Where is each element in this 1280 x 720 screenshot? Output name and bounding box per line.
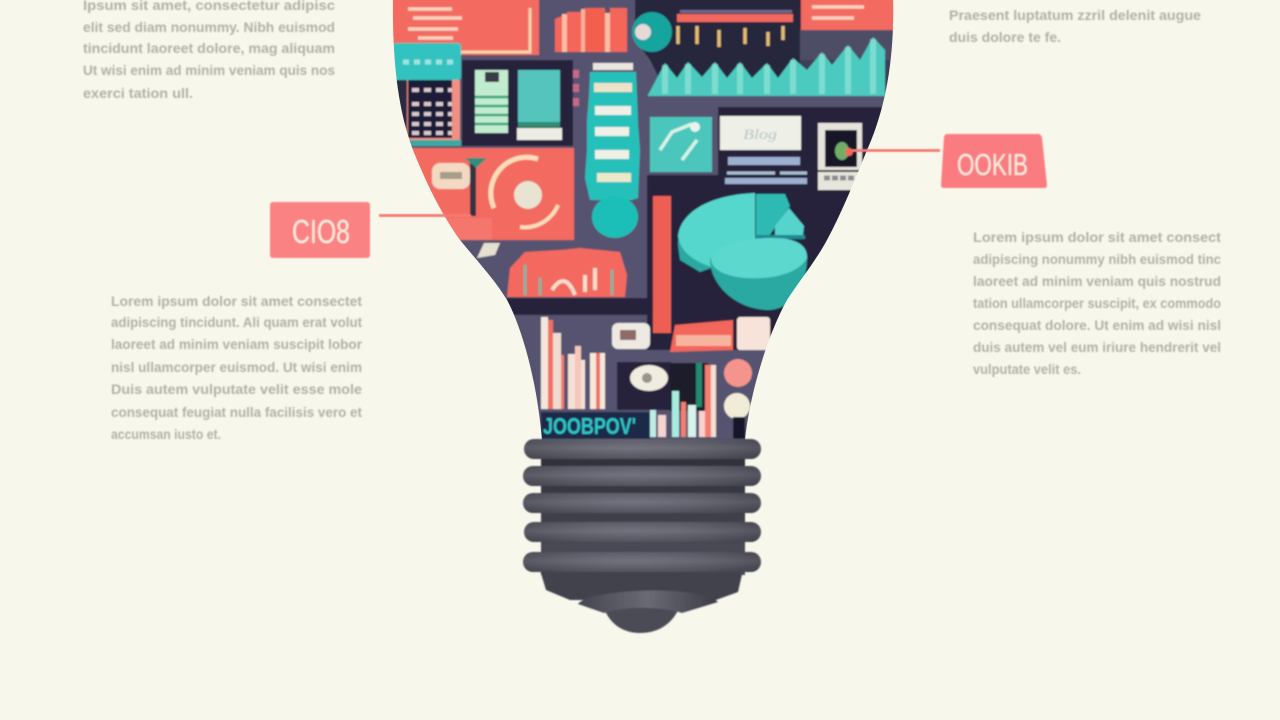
base tip [603,602,680,633]
connector line: left callout [379,214,471,217]
callout: right coral tag: OOKIB [957,147,1028,182]
text block: top left [83,0,335,101]
card: dark patch with oval [617,362,708,411]
text block: top left: Ut wisi enim ad minim veniam quis nos [83,62,335,78]
callout: left coral tag [270,202,370,258]
card: white label with blue lines: Blog [743,127,778,143]
panel: top left coral [390,0,539,55]
panel: dark right dashboard [647,107,895,350]
icon: photo frame [818,123,862,190]
base core [541,455,745,575]
text block: bottom left [111,293,363,442]
base dome [578,591,718,613]
bar chart: cyan and pink bars [650,365,716,437]
panel: dark top centre timeline [635,0,802,80]
text block: bottom left: Lorem ipsum dolor sit amet consectet [111,293,362,309]
lightbulb glass filled with data mosaic [385,0,900,445]
icon: pink and cream circles [724,359,752,439]
icon: teal square [650,117,712,172]
text block: bottom right: duis autem vel eum iriure hendrerit vel [973,339,1221,355]
text block: bottom left: nisl ullamcorper euismod. Ut wisi enim [111,359,362,375]
text block: bottom right: laoreet ad minim veniam quis nostrud [973,273,1221,289]
lightbulb screw base [523,439,761,633]
text block: bottom left: consequat feugiat nulla facilisis vero et [111,404,362,420]
icon: teal circle [632,12,672,52]
card: white label with blue lines [720,116,807,184]
chart: 3D teal pie [678,193,807,310]
base lower collar [540,570,743,600]
callout: right coral tag [941,134,1047,188]
connector line: right callout [852,149,940,152]
panel: dark cards with teal rectangle [462,60,573,146]
text block: bottom right: Lorem ipsum dolor sit amet consect [973,229,1221,245]
text block: bottom right: tation ullamcorper suscipit, ex commodo [973,295,1221,311]
text block: top left: elit sed diam nonummy. Nibh euismod [83,19,335,35]
text block: top right: Praesent luptatum zzril delenit augue [949,7,1201,23]
text block: bottom right: vulputate velit es. [973,361,1081,377]
thread ring 3 [523,493,761,513]
stacked list: teal column [576,63,640,238]
panel: teal header and keypad [393,43,461,146]
text block: bottom left: accumsan iusto et. [111,426,221,442]
chart: coral vertical bar [653,196,671,333]
panel: coral dial [408,148,574,240]
text block: bottom left: Duis autem vulputate velit esse mole [111,381,362,397]
bar chart: coral top [555,8,627,52]
thread ring 4 [524,522,761,542]
illustration: coral blob [477,243,647,315]
text block: bottom right: adipiscing nonummy nibh euismod tinc [973,251,1221,267]
callout: left coral tag: CIO8 [292,213,350,250]
area chart: teal mountains [648,30,895,96]
text block: bottom right: consequat dolore. Ut enim ad wisi nisl [973,317,1221,333]
text block: bottom right [973,229,1221,377]
panel: top right coral [801,0,896,30]
thread ring 1 [524,439,761,459]
thread ring 5 [523,552,761,572]
text block: top right [949,7,1201,45]
text block: top right: duis dolore te fe. [949,29,1061,45]
text block: top left: exerci tation ull. [83,85,193,101]
thread ring 2 [523,466,761,486]
text block: top left: tincidunt laoreet dolore, mag aliquam [83,40,335,56]
card: small pills [612,317,770,352]
text block: bottom left: laoreet ad minim veniam suscipit lobor [111,336,363,352]
bar chart: cream and pink bars [541,317,605,409]
text block: bottom left: adipiscing tincidunt. Ali quam erat volut [111,314,362,330]
label: teal lettering on navy: JOOBPOV' [543,413,636,439]
